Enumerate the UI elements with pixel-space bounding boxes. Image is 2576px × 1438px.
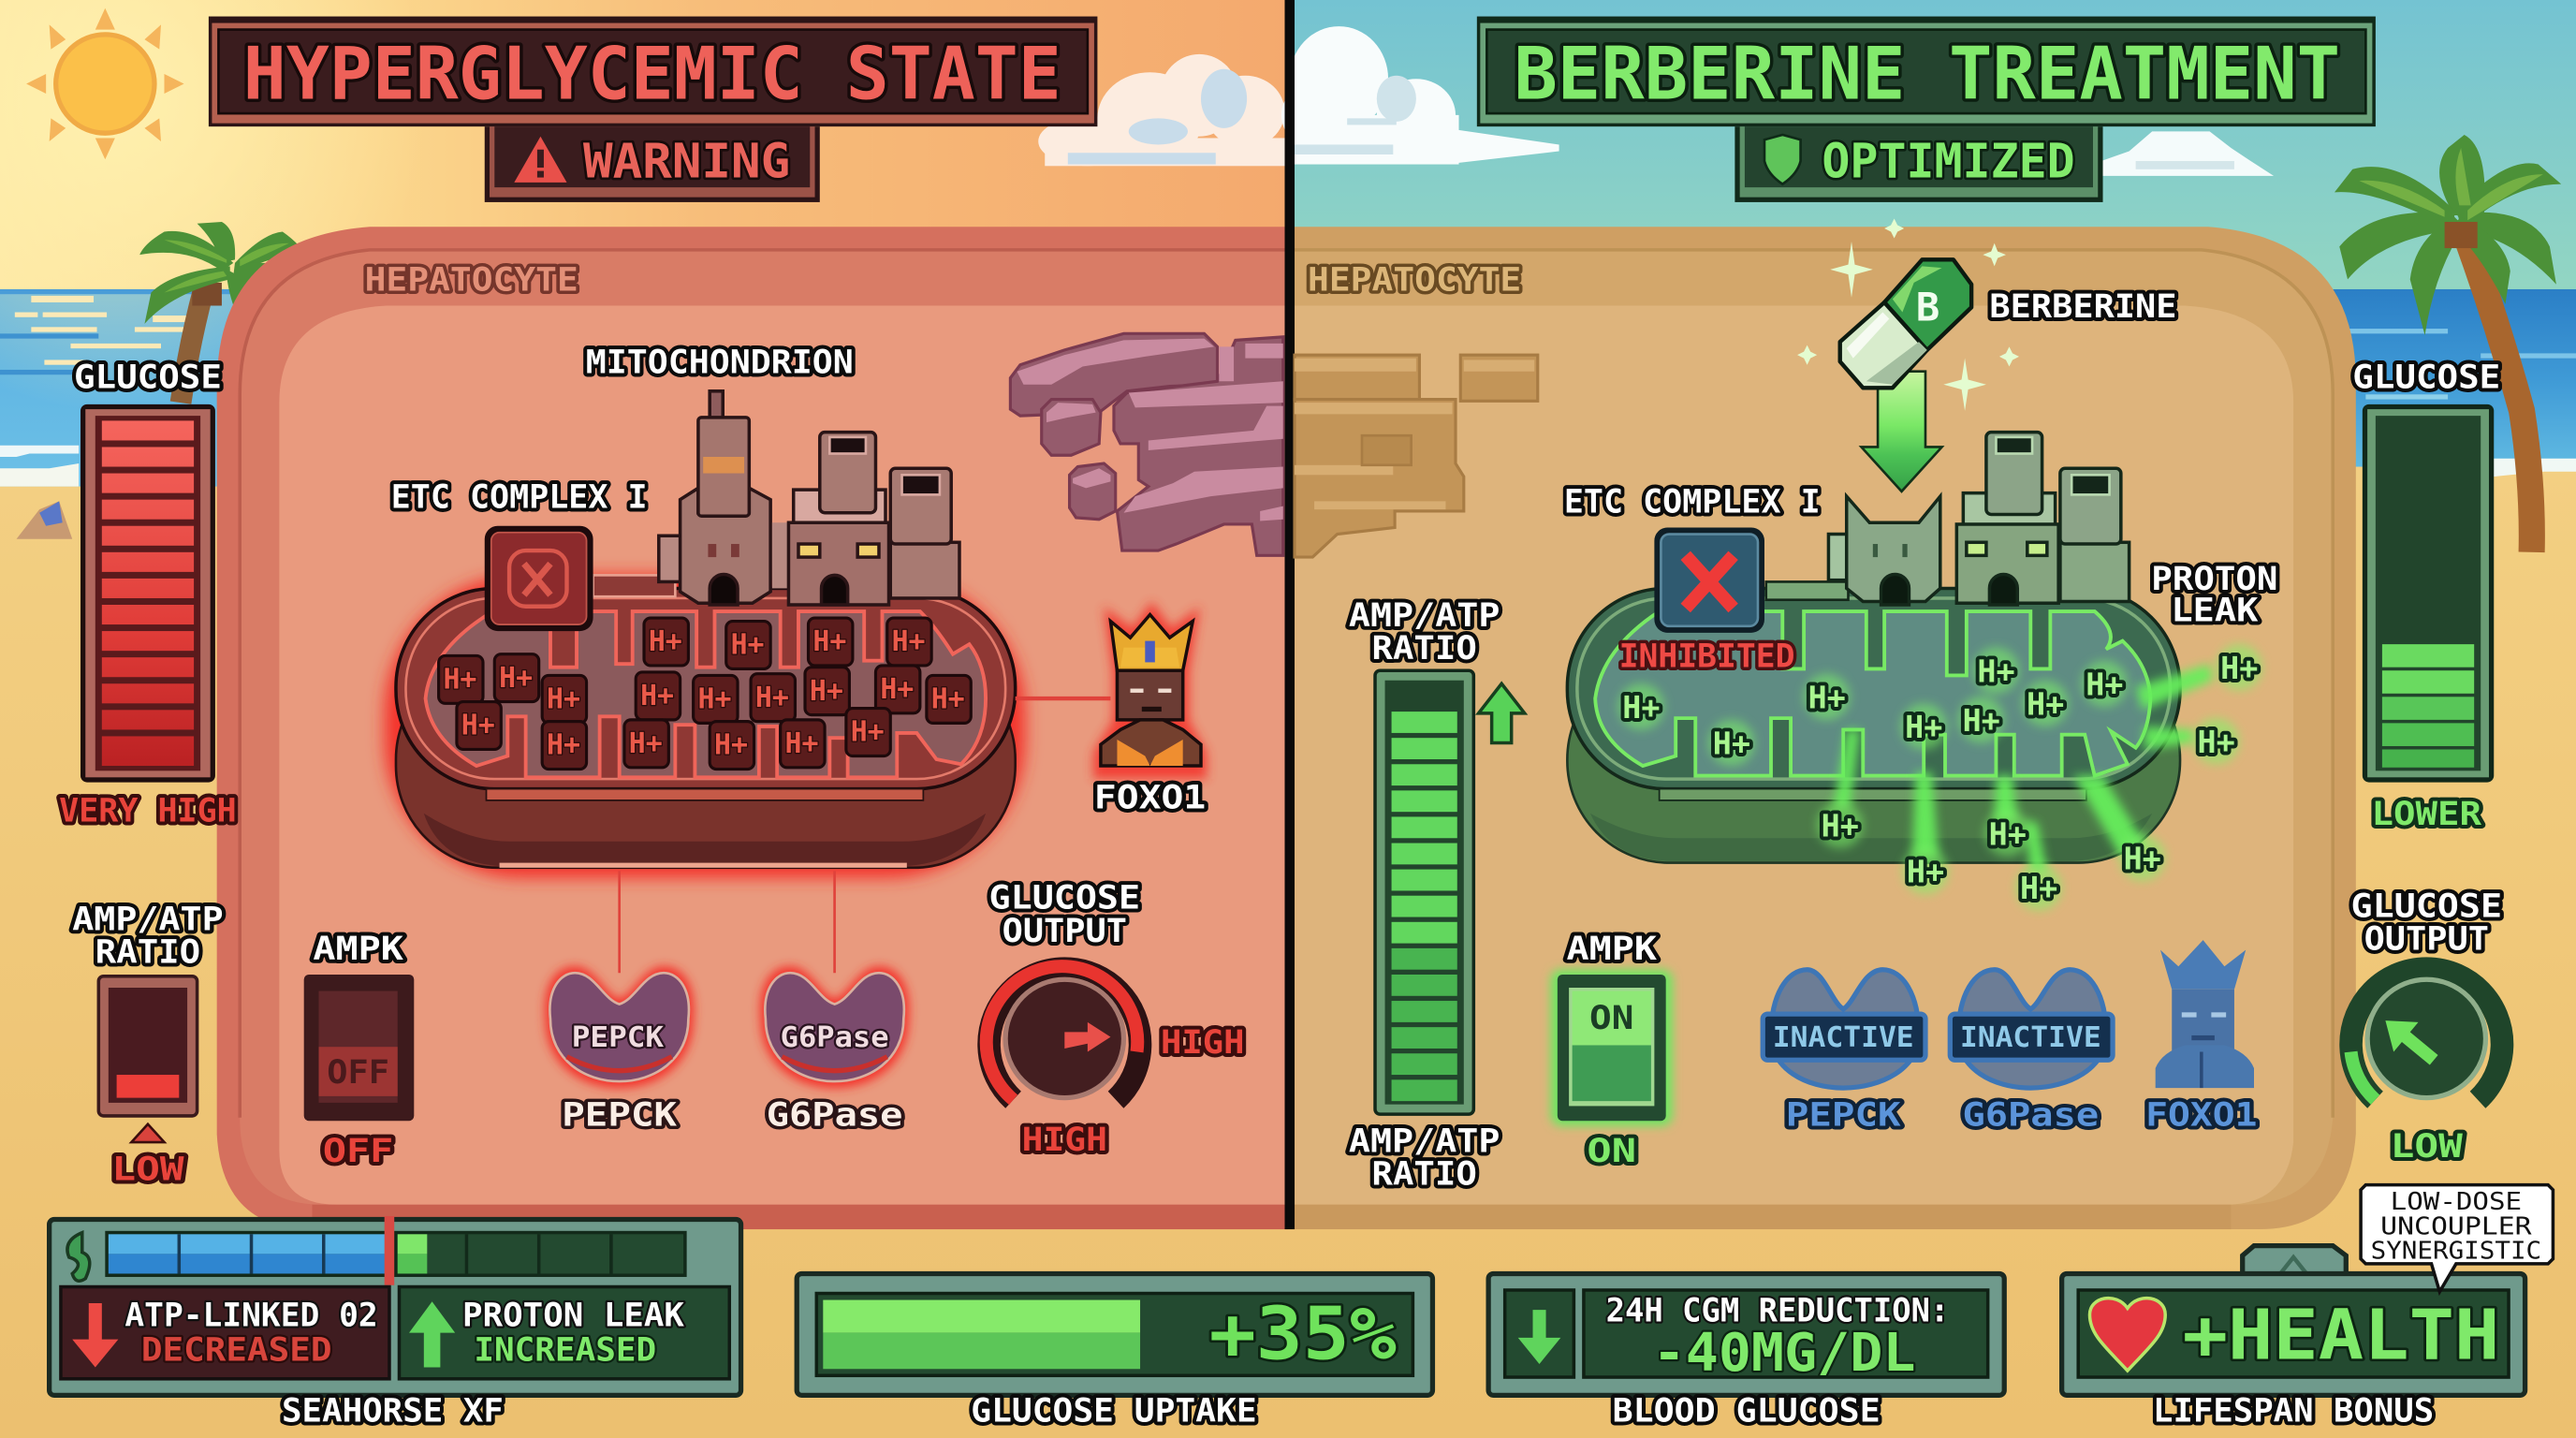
enzyme: PEPCK inactive: INACTIVE (1773, 1021, 1914, 1054)
dial: glucose output high (987, 879, 1244, 1159)
mitochondrion right (1567, 581, 2180, 863)
background: right beach scene (1288, 0, 2576, 1438)
enzyme: PEPCK inactive: PEPCK (1786, 1095, 1901, 1134)
dial: glucose output high: OUTPUT (1003, 912, 1127, 950)
center divider (1284, 0, 1295, 1229)
proton labels right: H+ (1977, 653, 2015, 690)
switch: AMPK on: AMPK (1566, 930, 1657, 968)
gauge: AMP/ATP ratio low (72, 901, 224, 1188)
proton cluster left: H+ (931, 683, 965, 716)
capsule: berberine: BERBERINE (1989, 287, 2177, 326)
arrow: berberine down (1862, 372, 1942, 492)
panel: left hepatocyte cell (217, 227, 1288, 1229)
switch: AMPK on: ON (1589, 999, 1633, 1037)
gauge: AMP/ATP ratio high: RATIO (1372, 629, 1477, 668)
icon: ETC complex I left (485, 526, 593, 631)
gauge: glucose very high (59, 358, 237, 830)
towers right (1828, 433, 2130, 605)
panel: right hepatocyte cell (1295, 227, 2356, 1229)
sparkles around capsule (1797, 218, 2019, 411)
proton cluster left: H+ (640, 680, 674, 712)
label: mitochondrion: MITOCHONDRION (586, 343, 854, 381)
proton cluster left: H+ (461, 710, 495, 742)
proton labels right: H+ (1907, 854, 1944, 890)
panel: lifespan bonus (2062, 1246, 2525, 1395)
icon: ETC complex I inhibited (1619, 527, 1794, 676)
gauge: glucose lower (2352, 358, 2500, 833)
organelle: right endoplasmic reticulum (1295, 355, 1538, 557)
clouds right (1281, 26, 2274, 176)
callout: low-dose uncoupler: LOW-DOSE (2391, 1188, 2522, 1216)
proton cluster left: H+ (698, 683, 731, 716)
mitochondrion left (385, 575, 1025, 877)
dial: glucose output low: OUTPUT (2364, 920, 2489, 959)
icon: shell on beach (17, 501, 72, 539)
dial: glucose output low: GLUCOSE (2351, 888, 2502, 926)
proton cluster left: H+ (892, 625, 926, 658)
label: proton leak (2151, 560, 2277, 630)
heading plate: hyperglycemic state: HYPERGLYCEMIC STATE (243, 32, 1061, 116)
proton cluster left: H+ (755, 682, 789, 714)
label: seahorse XF: SEAHORSE XF (282, 1391, 504, 1430)
organelle: left endoplasmic reticulum (1010, 333, 1283, 555)
gauge: glucose lower: LOWER (2371, 795, 2482, 833)
proton cluster left: H+ (714, 729, 748, 762)
proton cluster left: H+ (851, 716, 885, 749)
icon: seahorse (67, 1233, 90, 1281)
proton labels right: H+ (1713, 726, 1750, 762)
gauge: glucose lower: GLUCOSE (2352, 358, 2500, 396)
enzyme: PEPCK active (545, 966, 694, 1134)
enzyme: G6Pase inactive (1950, 970, 2113, 1134)
proton cluster left: H+ (547, 683, 580, 716)
panel: blood glucose: 24H CGM REDUCTION: (1606, 1291, 1949, 1329)
label: lifespan bonus: LIFESPAN BONUS (2153, 1391, 2434, 1430)
proton cluster left: H+ (880, 673, 914, 706)
enzyme: G6Pase active: G6Pase (767, 1095, 902, 1134)
readout: proton leak: INCREASED (474, 1330, 656, 1369)
heading plate: berberine treatment: BERBERINE TREATMENT (1514, 32, 2340, 116)
proton labels right: H+ (2124, 841, 2161, 877)
cloud left (1038, 54, 1284, 166)
readout: ATP-linked O2 (61, 1287, 389, 1379)
proton cluster left: H+ (547, 729, 580, 762)
enzyme: G6Pase active: G6Pase (781, 1021, 889, 1054)
background: left beach scene (0, 0, 1288, 1438)
proton cluster left (439, 618, 971, 770)
proton labels right: H+ (1963, 702, 2000, 739)
switch: AMPK off: OFF (327, 1053, 389, 1092)
panel: glucose uptake: +35% (1209, 1293, 1397, 1377)
switch: AMPK on (1551, 930, 1673, 1170)
readout: ATP-linked O2: ATP-LINKED 02 (124, 1297, 378, 1335)
label: hepatocyte left: HEPATOCYTE (365, 261, 578, 300)
dial: glucose output high: HIGH (1161, 1023, 1244, 1062)
proton labels right: H+ (1622, 689, 1660, 726)
panel: seahorse XF (50, 1216, 741, 1395)
panel: glucose uptake (797, 1273, 1432, 1395)
dial: glucose output high: HIGH (1022, 1121, 1107, 1159)
figure: FOXO1 inactive: FOXO1 (2145, 1095, 2258, 1134)
switch: AMPK off: OFF (323, 1132, 393, 1170)
panel: blood glucose: -40MG/DL (1653, 1323, 1915, 1384)
switch: AMPK off (304, 930, 414, 1170)
towers left (659, 391, 959, 605)
status plate: optimized (1734, 126, 2103, 202)
icon: sun (26, 8, 184, 159)
status plate: warning (485, 126, 820, 202)
enzyme: PEPCK inactive (1763, 970, 1925, 1134)
proton cluster left: H+ (810, 675, 843, 708)
label: proton leak: PROTON (2151, 560, 2277, 598)
icon: ETC complex I inhibited: INHIBITED (1619, 638, 1794, 676)
gauge: AMP/ATP ratio low: LOW (111, 1150, 185, 1188)
switch: AMPK off: AMPK (313, 930, 403, 968)
figure: FOXO1 active (1093, 601, 1207, 817)
proton labels right (1622, 650, 2258, 906)
panel: blood glucose (1488, 1273, 2004, 1395)
proton cluster left: H+ (812, 625, 846, 658)
figure: FOXO1 inactive (2145, 940, 2258, 1134)
status plate: optimized: OPTIMIZED (1822, 135, 2075, 190)
readout: proton leak (399, 1287, 729, 1379)
arrow: AMP/ATP up (1479, 683, 1525, 742)
gauge: AMP/ATP ratio high (1349, 596, 1500, 1194)
icon: heart (2089, 1299, 2165, 1371)
label: blood glucose: BLOOD GLUCOSE (1613, 1391, 1881, 1430)
capsule: berberine: B (1916, 284, 1939, 330)
proton cluster left: H+ (629, 727, 663, 760)
label: proton leak: LEAK (2171, 592, 2258, 630)
callout: low-dose uncoupler: SYNERGISTIC (2371, 1238, 2541, 1266)
label: ETC complex I left: ETC COMPLEX I (391, 477, 648, 516)
enzyme: G6Pase inactive: INACTIVE (1960, 1021, 2101, 1054)
proton labels right: H+ (2027, 686, 2064, 723)
proton labels right: H+ (2220, 650, 2258, 686)
proton cluster left: H+ (443, 664, 476, 697)
status plate: warning: WARNING (583, 135, 790, 190)
enzyme: G6Pase inactive: G6Pase (1962, 1095, 2099, 1134)
gauge: glucose very high: VERY HIGH (59, 792, 237, 830)
gauge: glucose very high: GLUCOSE (74, 358, 222, 396)
proton labels right: H+ (2086, 667, 2123, 703)
proton labels right: H+ (1989, 815, 2027, 852)
readout: proton leak: PROTON LEAK (462, 1297, 684, 1335)
switch: AMPK on: ON (1587, 1132, 1636, 1170)
proton cluster left: H+ (499, 662, 533, 695)
label: hepatocyte right: HEPATOCYTE (1308, 261, 1521, 300)
gauge: AMP/ATP ratio high: RATIO (1372, 1155, 1477, 1194)
connector lines left (620, 698, 1110, 973)
figure: FOXO1 active: FOXO1 (1094, 779, 1206, 817)
enzyme: PEPCK active: PEPCK (562, 1095, 677, 1134)
proton cluster left: H+ (785, 727, 818, 760)
capsule: berberine (1840, 259, 2177, 388)
dial: glucose output low (2351, 888, 2502, 1166)
label: ETC complex I right: ETC COMPLEX I (1564, 483, 1821, 521)
dial: glucose output low: LOW (2391, 1127, 2464, 1166)
proton cluster left: H+ (731, 629, 765, 662)
proton labels right: H+ (1808, 680, 1846, 716)
enzyme: G6Pase active (760, 966, 909, 1134)
panel: lifespan bonus: +HEALTH (2183, 1297, 2499, 1376)
proton labels right: H+ (2198, 724, 2235, 760)
proton labels right: H+ (2020, 870, 2057, 906)
gauge: AMP/ATP ratio low: RATIO (95, 933, 200, 972)
seahorse bar (105, 1216, 687, 1285)
palm tree left (139, 222, 305, 403)
palm tree right (2334, 135, 2561, 552)
proton cluster left: H+ (649, 625, 682, 658)
gauge: AMP/ATP ratio high: AMP/ATP (1349, 596, 1500, 635)
enzyme: PEPCK active: PEPCK (572, 1021, 664, 1054)
callout: low-dose uncoupler: UNCOUPLER (2380, 1212, 2532, 1240)
gauge: AMP/ATP ratio high: AMP/ATP (1349, 1123, 1500, 1161)
proton labels right: H+ (1822, 808, 1859, 844)
proton leak streams (1618, 644, 2262, 911)
label: glucose uptake: GLUCOSE UPTAKE (971, 1391, 1257, 1430)
proton labels right: H+ (1905, 709, 1942, 745)
readout: ATP-linked O2: DECREASED (141, 1330, 332, 1369)
gauge: AMP/ATP ratio low: AMP/ATP (72, 901, 224, 939)
dial: glucose output high: GLUCOSE (989, 879, 1140, 917)
callout: low-dose uncoupler (2361, 1185, 2553, 1292)
